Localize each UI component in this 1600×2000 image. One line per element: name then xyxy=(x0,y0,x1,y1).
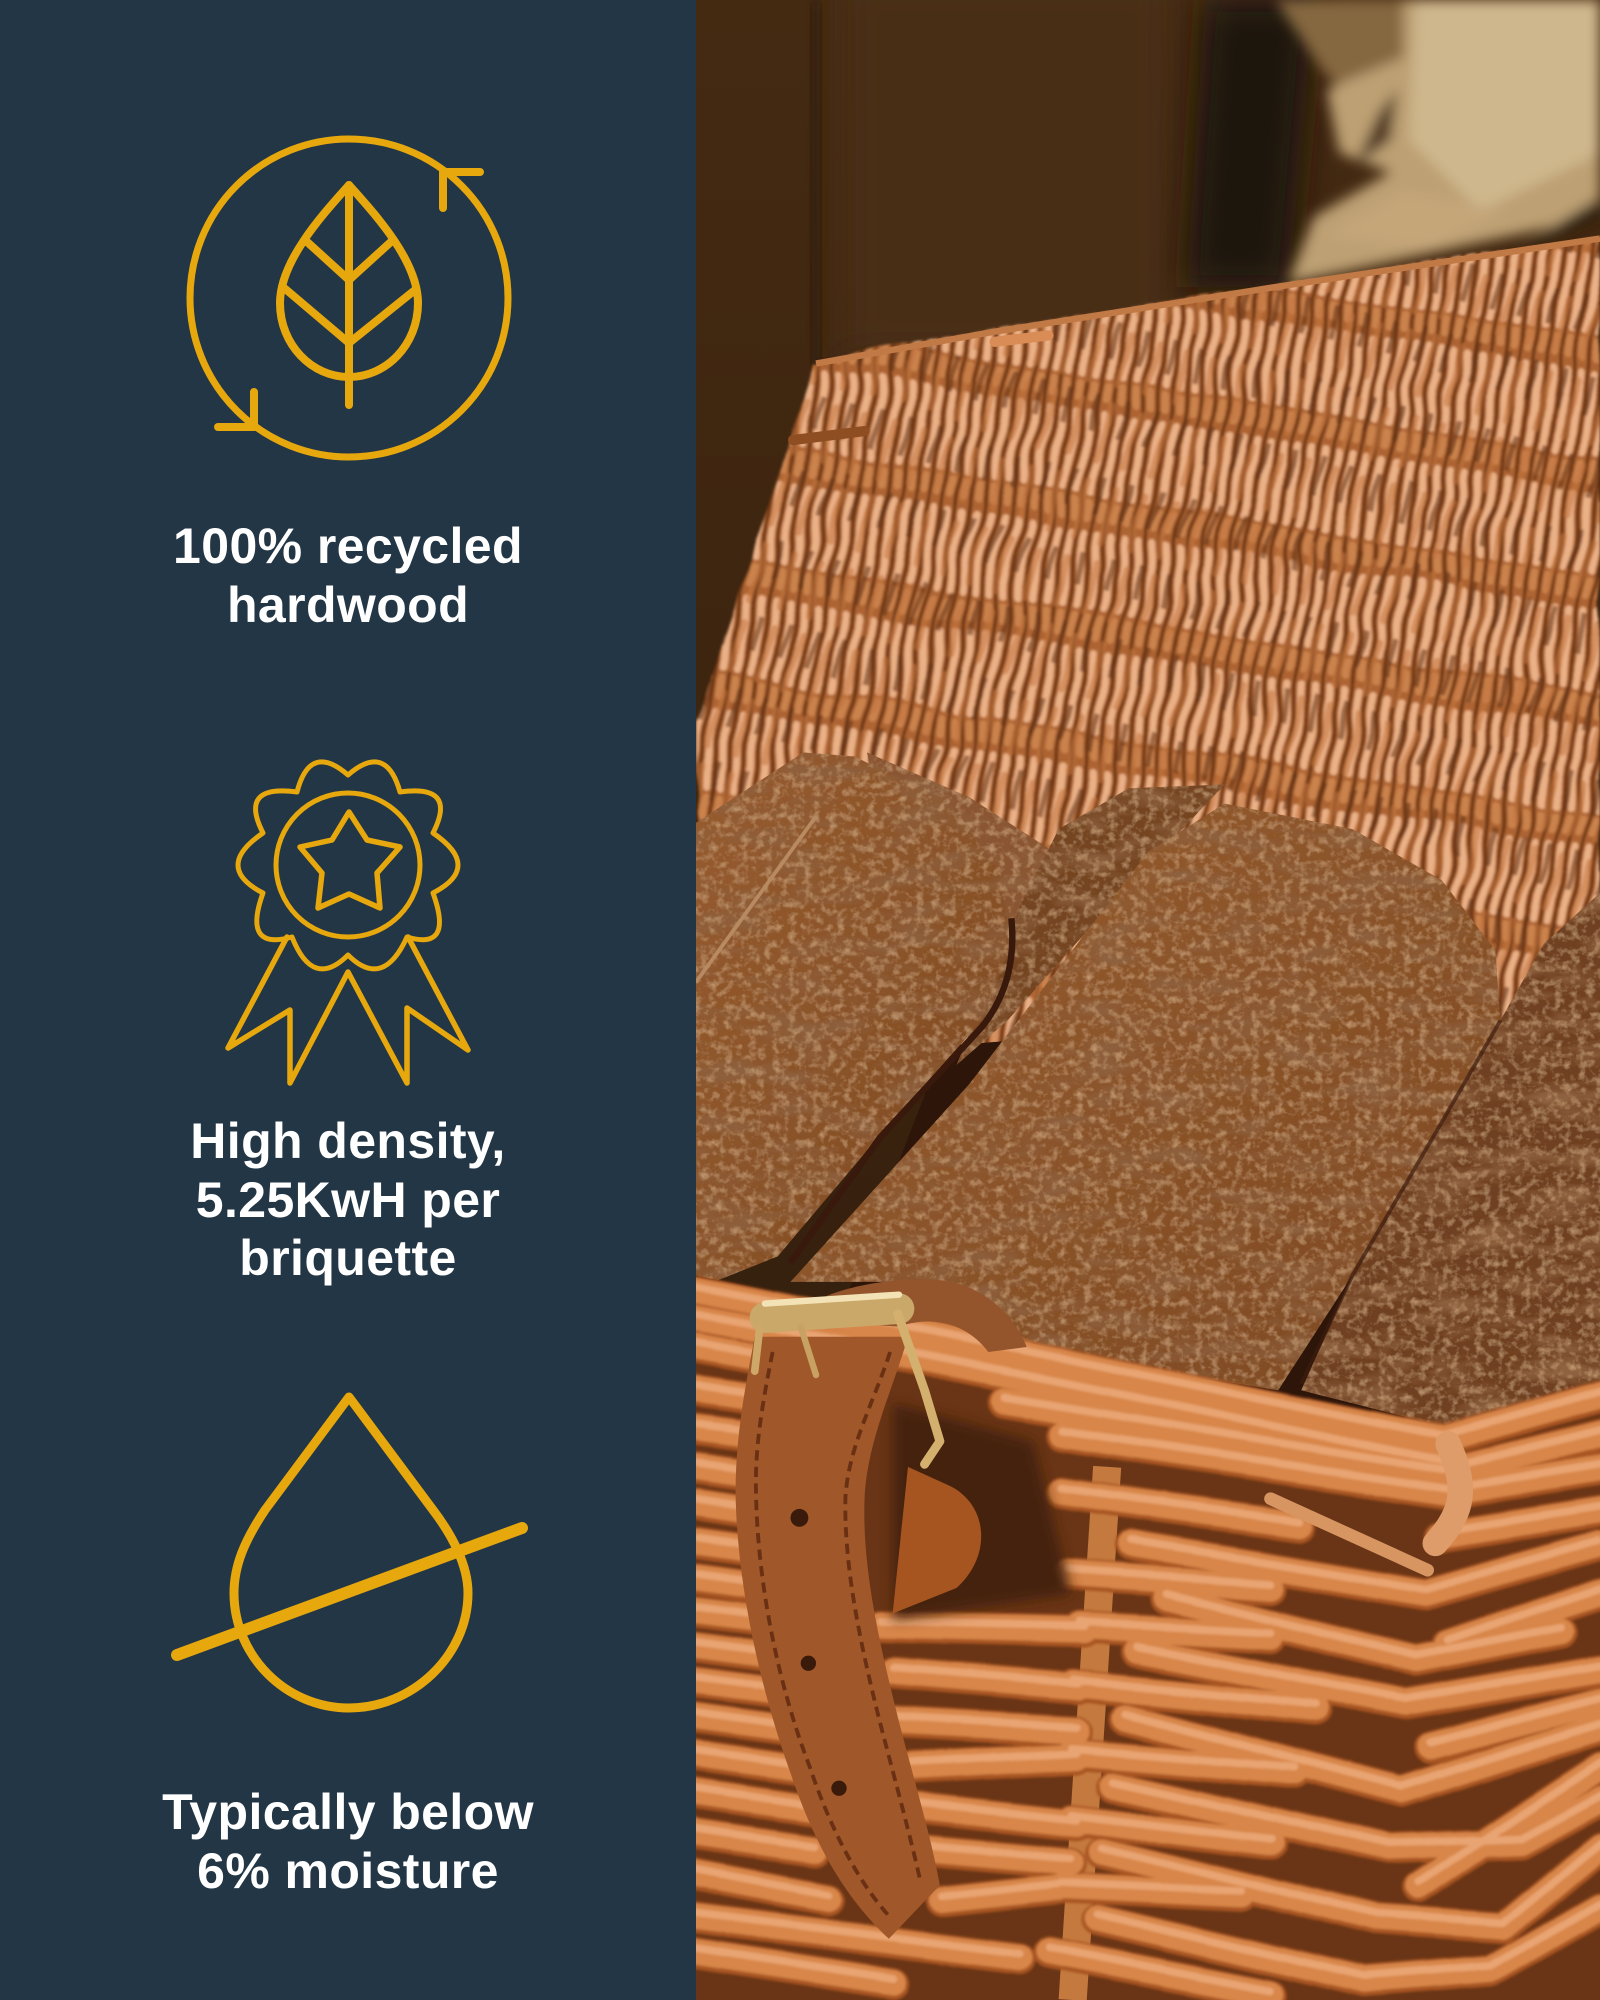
text: moisture: Typically below xyxy=(162,1784,534,1840)
basket corner xyxy=(1435,1444,1460,1543)
brass buckle xyxy=(755,1295,940,1464)
text: high density: briquette xyxy=(239,1230,457,1286)
basket stake xyxy=(1073,1467,1107,2000)
icon: crossed-out water drop xyxy=(171,1392,528,1712)
panel: product features xyxy=(0,0,696,2000)
main briquette xyxy=(790,804,1500,1390)
left briquette xyxy=(696,753,1011,1282)
text: high density: 5.25KwH per xyxy=(196,1172,500,1228)
left log end shadow xyxy=(790,918,1012,1263)
right briquette xyxy=(1301,893,1600,1426)
leather strap xyxy=(736,1337,940,1939)
text: moisture: 6% moisture xyxy=(197,1842,499,1898)
stone wall xyxy=(1276,0,1600,283)
crack between main and right log xyxy=(1301,1020,1500,1384)
gap shadow behind logs xyxy=(790,1020,1500,1441)
wood wall background xyxy=(696,0,1600,2000)
text: high density xyxy=(190,1113,506,1286)
text: recycled hardwood: 100% recycled xyxy=(173,518,523,574)
icon: award rosette with star xyxy=(225,759,471,1086)
photo: briquettes in wicker basket xyxy=(696,0,1600,2000)
icon: leaf in recycling circle xyxy=(186,136,512,460)
wicker lid xyxy=(696,236,1600,1059)
leather strap loop behind buckle xyxy=(790,1280,1027,1352)
back briquettes xyxy=(867,753,1225,1065)
text: recycled hardwood: hardwood xyxy=(227,576,469,632)
leather keeper xyxy=(893,1467,981,1614)
text: recycled hardwood xyxy=(173,518,523,632)
text: moisture xyxy=(162,1784,534,1898)
basket front base xyxy=(696,1276,1600,2000)
basket rods xyxy=(696,1286,1600,1996)
loose wicker stick xyxy=(1271,1499,1428,1570)
text: high density: High density, xyxy=(190,1113,506,1169)
shadow behind strap xyxy=(893,1403,1071,1620)
log seam xyxy=(696,816,816,982)
